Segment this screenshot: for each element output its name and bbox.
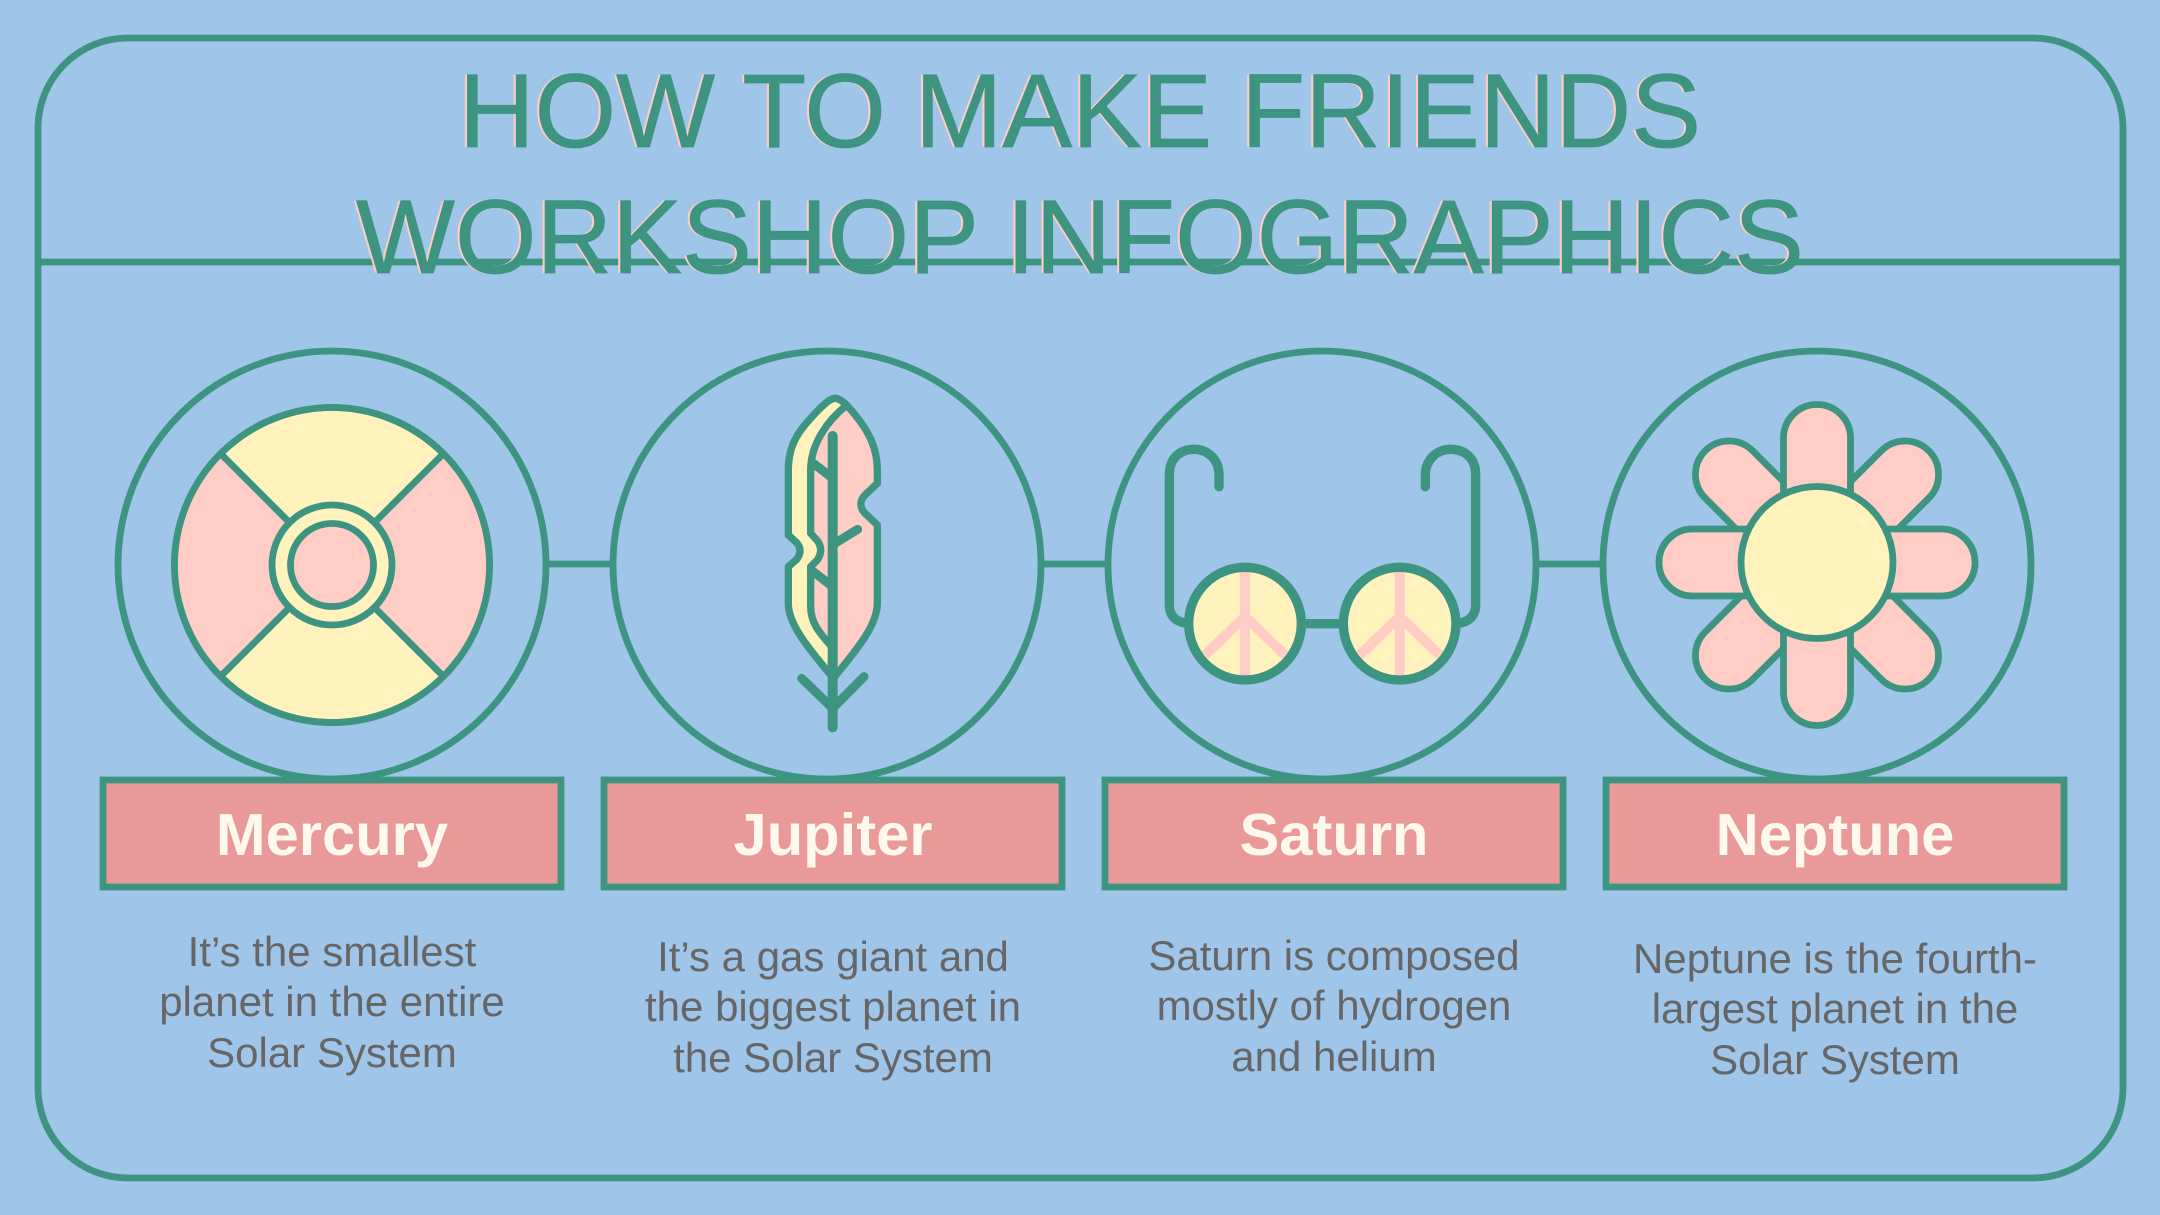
- icon circle: Mercury: [118, 351, 546, 779]
- label: Saturn: [1105, 780, 1563, 887]
- icon: feather: [788, 398, 877, 727]
- description: Jupiter: the Solar System: [673, 1034, 993, 1081]
- description: Jupiter: It’s a gas giant and: [657, 933, 1009, 980]
- label: Jupiter: [604, 780, 1062, 887]
- description: Neptune: Solar System: [1710, 1036, 1960, 1083]
- icon circle: Neptune: [1603, 351, 2031, 779]
- icon circle: Saturn: [1108, 351, 1536, 779]
- description: Saturn: and helium: [1231, 1033, 1437, 1080]
- description: Mercury: Solar System: [207, 1029, 457, 1076]
- label: Saturn: Saturn: [1239, 801, 1429, 868]
- title: HOW TO MAKE FRIENDS: [459, 53, 1701, 170]
- description: Saturn: [1148, 932, 1520, 1080]
- connector lines between circles: [546, 561, 1603, 567]
- panel: Mercury: [103, 351, 561, 1076]
- icon: peace glasses: [1169, 449, 1476, 680]
- header divider line: [38, 259, 2123, 265]
- panel: Neptune: [1603, 351, 2064, 1083]
- description: Mercury: It’s the smallest: [188, 928, 477, 975]
- description: Saturn: Saturn is composed: [1148, 932, 1520, 979]
- label: Mercury: [103, 780, 561, 887]
- description: Mercury: [159, 928, 505, 1076]
- description: Neptune: [1633, 935, 2037, 1083]
- label: Neptune: Neptune: [1716, 801, 1954, 868]
- description: Jupiter: the biggest planet in: [645, 983, 1021, 1030]
- icon: lifebuoy: [174, 408, 490, 722]
- description: Neptune: Neptune is the fourth-: [1633, 935, 2037, 982]
- label: Mercury: Mercury: [216, 801, 448, 868]
- title: [354, 53, 1804, 296]
- description: Saturn: mostly of hydrogen: [1157, 982, 1511, 1029]
- icon: flower: [1659, 404, 1975, 726]
- panel: Jupiter: [604, 351, 1062, 1081]
- title: WORKSHOP INFOGRAPHICS: [356, 179, 1804, 296]
- icon circle: Jupiter: [613, 351, 1041, 779]
- description: Mercury: planet in the entire: [159, 978, 505, 1025]
- label: Jupiter: Jupiter: [734, 801, 932, 868]
- description: Jupiter: [645, 933, 1021, 1081]
- panel: Saturn: [1105, 351, 1563, 1080]
- description: Neptune: largest planet in the: [1652, 985, 2018, 1032]
- label: Neptune: [1606, 780, 2064, 887]
